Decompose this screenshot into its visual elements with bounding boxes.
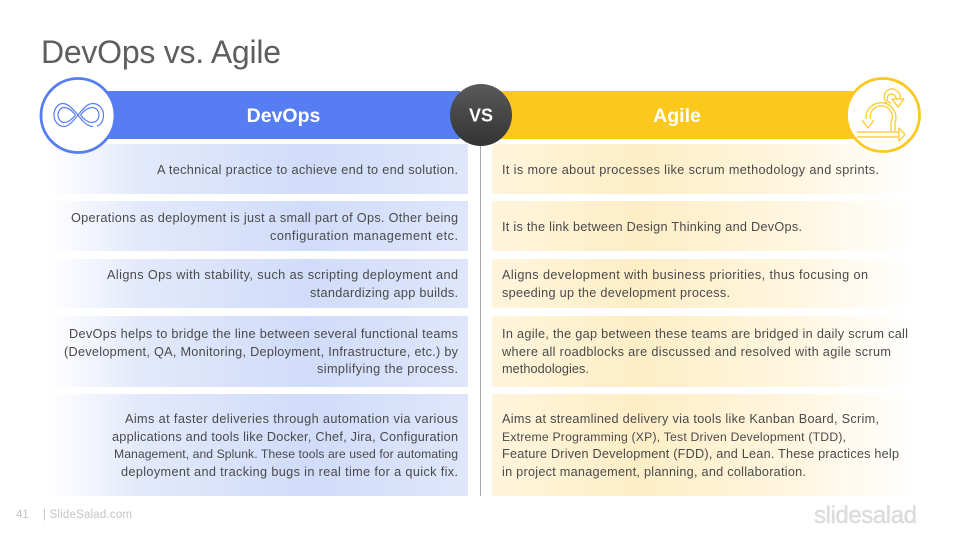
row: DevOps operations <box>48 201 468 251</box>
row: DevOps stability: Aligns Ops with stability, such as scripting deployment and <box>107 268 458 282</box>
footer logo wordmark: slidesalad <box>814 502 917 529</box>
row: DevOps stability: standardizing app builds. <box>310 286 458 300</box>
row: DevOps stability <box>48 259 468 308</box>
row: Agile streamlined delivery <box>492 394 912 496</box>
row: DevOps functional teams: simplifying the process. <box>317 362 458 376</box>
row: DevOps operations: configuration management etc. <box>270 229 458 243</box>
header bar: DevOps <box>100 91 460 139</box>
title: DevOps vs. Agile <box>41 34 281 70</box>
row: Agile streamlined delivery: Aims at streamlined delivery via tools like Kanban Board, Scrim, <box>502 412 879 426</box>
badge: VS <box>450 84 512 146</box>
footer source: | SlideSalad.com <box>43 509 132 521</box>
center divider line <box>480 140 481 496</box>
row: Agile business priorities: speeding up the development process. <box>502 286 730 300</box>
icon: agile loop in yellow circle <box>846 78 920 152</box>
badge: VS: VS <box>469 106 493 126</box>
row: Agile link <box>492 201 912 251</box>
row: Agile streamlined delivery: Feature Driven Development (FDD), and Lean. These practices help <box>502 447 899 461</box>
panel: DevOps rows <box>48 144 468 496</box>
icon: infinity in blue circle <box>41 78 115 152</box>
row: DevOps deliveries: Aims at faster deliveries through automation via various <box>125 412 458 426</box>
row: Agile daily scrum: In agile, the gap between these teams are bridged in daily scrum call <box>502 327 908 341</box>
panel: Agile rows <box>492 144 912 496</box>
row: DevOps technical practice: A technical practice to achieve end to end solution. <box>157 163 458 177</box>
row: DevOps functional teams: DevOps helps to bridge the line between several functional teams <box>69 327 458 341</box>
row: Agile business priorities <box>492 259 912 308</box>
row: DevOps deliveries <box>48 394 468 496</box>
row: Agile daily scrum: methodologies. <box>502 362 589 376</box>
row: DevOps deliveries: Management, and Splunk. These tools are used for automating <box>114 447 458 461</box>
row: Agile business priorities: Aligns development with business priorities, thus focusing on <box>502 268 868 282</box>
row: DevOps operations: Operations as deployment is just a small part of Ops. Other being <box>71 211 458 225</box>
row: DevOps deliveries: deployment and tracking bugs in real time for a quick fix. <box>121 465 458 479</box>
row: DevOps technical practice <box>48 144 468 194</box>
row: DevOps deliveries: applications and tools like Docker, Chef, Jira, Configuration <box>112 430 458 444</box>
row: Agile daily scrum <box>492 316 912 387</box>
row: Agile streamlined delivery: in project management, planning, and collaboration. <box>502 465 806 479</box>
header bar: Agile: Agile <box>653 105 701 127</box>
row: Agile processes: It is more about processes like scrum methodology and sprints. <box>502 163 879 177</box>
row: Agile streamlined delivery: Extreme Programming (XP), Test Driven Development (TDD), <box>502 430 846 444</box>
header bar: Agile <box>500 91 865 139</box>
row: Agile processes <box>492 144 912 194</box>
page number: 41 <box>16 509 29 521</box>
row: DevOps functional teams: (Development, QA, Monitoring, Deployment, Infrastructure, etc.) by <box>64 345 459 359</box>
row: Agile daily scrum: where all roadblocks are discussed and resolved with agile scrum <box>501 345 891 359</box>
row: DevOps functional teams <box>48 316 468 387</box>
row: Agile link: It is the link between Design Thinking and DevOps. <box>502 220 802 234</box>
header bar: DevOps: DevOps <box>247 105 320 127</box>
